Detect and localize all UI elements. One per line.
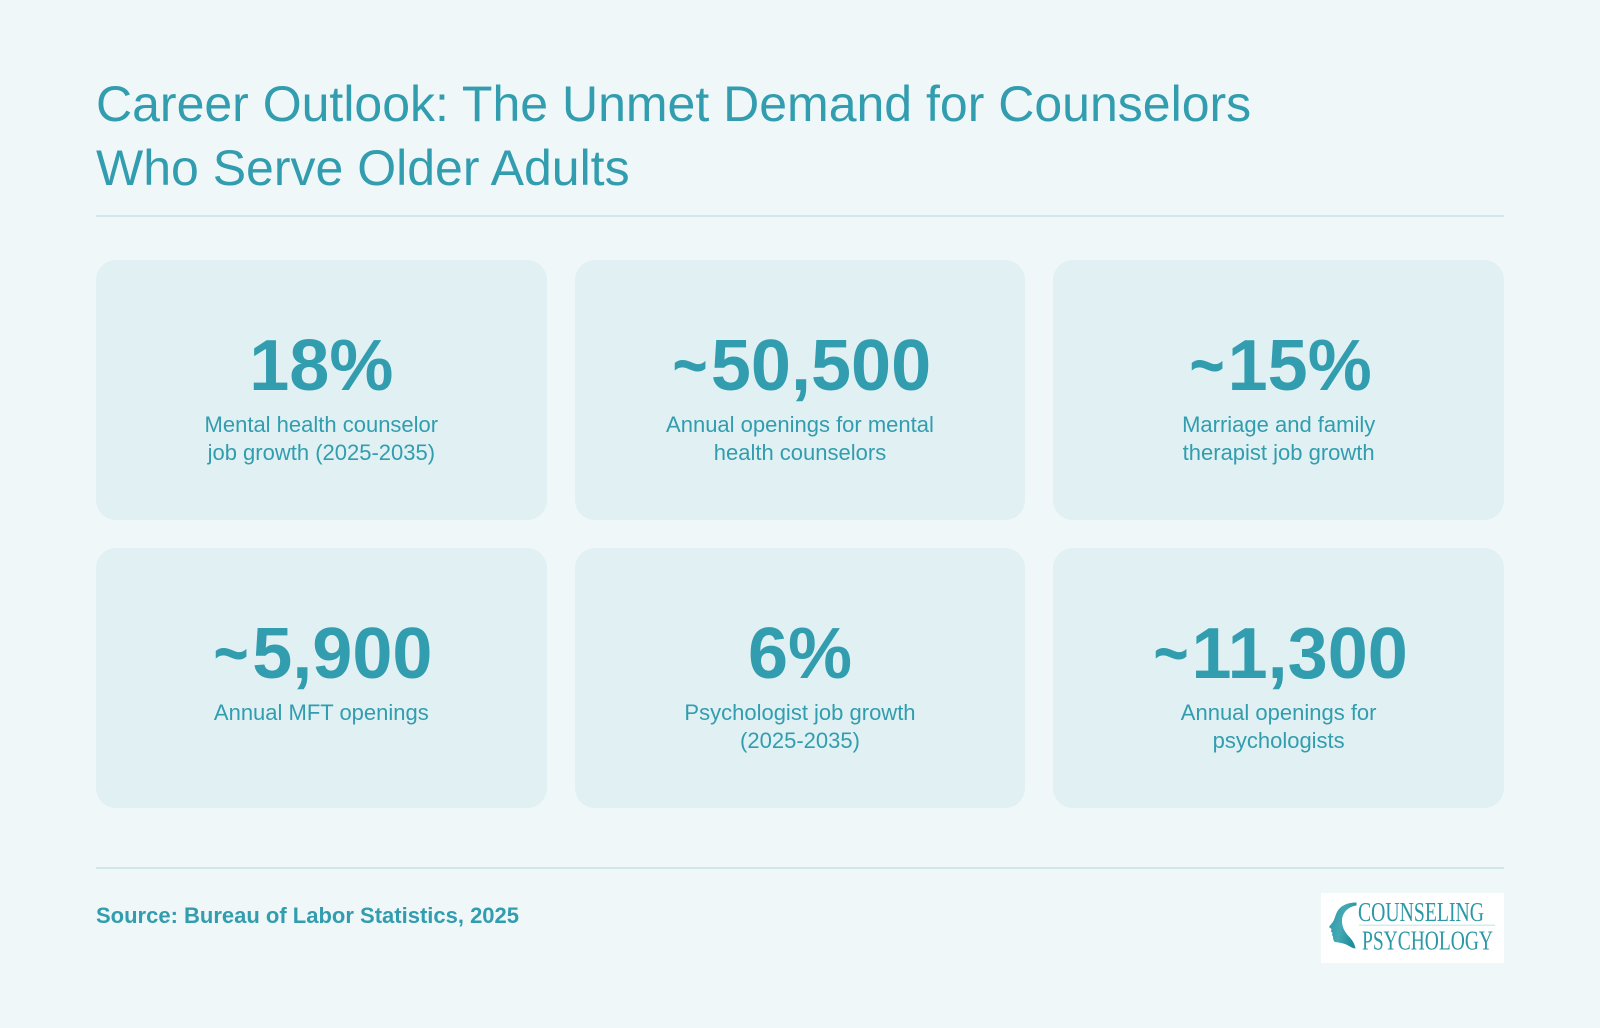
stat label xyxy=(1182,412,1376,465)
stat label xyxy=(666,412,934,465)
stat label: Annual MFT openings xyxy=(214,700,429,725)
stat card: mental health counselor openings xyxy=(575,260,1025,520)
stat label xyxy=(684,700,916,753)
stat value: ~ xyxy=(214,614,249,694)
title: Career Outlook: The Unmet Demand for Counselors xyxy=(96,76,1251,132)
stat label xyxy=(1180,700,1376,753)
stat card: psychologist openings xyxy=(1053,548,1504,808)
logo: Counseling Psychology xyxy=(1321,893,1504,963)
stat card: mental health counselor growth xyxy=(96,260,547,520)
stat label: Annual openings for xyxy=(1181,700,1376,725)
stat label: therapist job growth xyxy=(1183,440,1375,465)
icon: head silhouette xyxy=(1329,902,1356,948)
stat value: 15% xyxy=(1228,326,1372,406)
stat label: psychologists xyxy=(1213,728,1345,753)
stat card: marriage and family therapist growth xyxy=(1053,260,1504,520)
title: Who Serve Older Adults xyxy=(96,140,630,196)
title xyxy=(96,76,1251,196)
stat label: Mental health counselor xyxy=(205,412,438,437)
stat value: 11,300 xyxy=(1192,614,1408,694)
stat value: ~ xyxy=(672,326,708,406)
stat value: 5,900 xyxy=(252,614,432,694)
stat label: Annual openings for mental xyxy=(666,412,934,437)
stat label xyxy=(205,412,438,465)
stat value: ~ xyxy=(1153,614,1188,694)
stat value: ~ xyxy=(1189,326,1224,406)
stat value: 6% xyxy=(748,614,852,694)
stat value: 18% xyxy=(249,326,393,406)
stat card: psychologist growth xyxy=(575,548,1025,808)
source note: Source: Bureau of Labor Statistics, 2025 xyxy=(96,903,519,928)
stat label: (2025-2035) xyxy=(740,728,860,753)
stat value: 50,500 xyxy=(711,326,931,406)
stat label: job growth (2025-2035) xyxy=(208,440,435,465)
stat label: Psychologist job growth xyxy=(684,700,916,725)
stat label: Marriage and family xyxy=(1182,412,1375,437)
stat label: health counselors xyxy=(714,440,886,465)
stat card: MFT openings xyxy=(96,548,547,808)
logo wordmark xyxy=(1358,897,1495,956)
